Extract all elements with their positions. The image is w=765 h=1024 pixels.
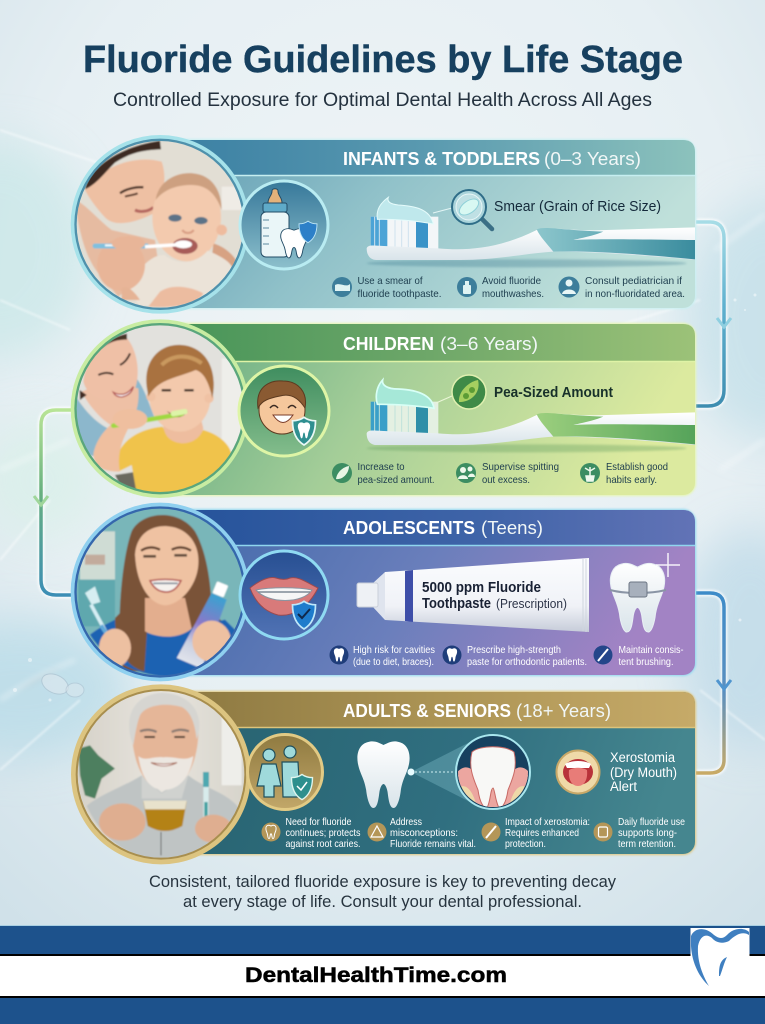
arrow: infants to children [696, 222, 731, 406]
heading: (0–3 Years) [544, 148, 641, 169]
tip: use a smear: Use a smear of [358, 275, 423, 287]
tip: address misconceptions: Fluoride remains vital. [390, 838, 476, 850]
label: xerostomia alert: Xerostomia [610, 750, 675, 765]
heading: CHILDREN [343, 333, 434, 354]
heading: INFANTS & TODDLERS [343, 148, 540, 169]
tip: consult pediatrician [558, 275, 685, 300]
panel: adolescents [165, 509, 696, 676]
subtitle: Controlled Exposure for Optimal Dental Health Across All Ages [113, 90, 652, 111]
tip: need for fluoride: Need for fluoride [286, 816, 352, 828]
tip: need for fluoride: continues; protects [286, 827, 360, 839]
tip: impact of xerostomia: Impact of xerostomia: [505, 816, 590, 828]
tip: avoid mouthwash [457, 275, 544, 300]
closing statement [149, 873, 617, 911]
tip: prescribe [442, 644, 587, 668]
arrow: children to adolescents [34, 410, 72, 595]
closing statement: at every stage of life. Consult your dental professional. [183, 893, 582, 911]
website: DentalHealthTime.com [245, 964, 507, 987]
prescription toothpaste tube: 5000 ppm Fluoride [422, 580, 541, 596]
tip: address misconceptions: misconceptions: [390, 827, 458, 839]
label: pea-sized: Pea-Sized Amount [494, 385, 613, 401]
tip: avoid mouthwash: Avoid fluoride [482, 275, 541, 287]
photo: teen with braces, toothbrush and toothpaste [71, 503, 249, 681]
tip: daily fluoride: Daily fluoride use [618, 816, 685, 828]
title: Fluoride Guidelines by Life Stage [83, 39, 683, 81]
label: xerostomia alert: Alert [610, 779, 637, 794]
photo: mother and child brushing [71, 319, 249, 498]
tip: impact of xerostomia [482, 816, 590, 850]
tip: daily fluoride: term retention. [618, 838, 676, 850]
panel: children [165, 323, 696, 496]
tip: increase: pea-sized amount. [358, 474, 434, 486]
tip: daily fluoride: supports long- [618, 827, 677, 839]
panel: infants and toddlers [165, 139, 696, 309]
tip: maintain brushing: tent brushing. [618, 656, 674, 668]
tip: supervise: Supervise spitting [482, 461, 559, 473]
tip: high risk: High risk for cavities [353, 644, 435, 656]
panel: adults and seniors [165, 691, 696, 855]
closing statement: Consistent, tailored fluoride exposure is key to preventing decay [149, 873, 617, 891]
prescription toothpaste tube [357, 558, 589, 632]
tip: avoid mouthwash: mouthwashes. [482, 288, 544, 300]
footer band [0, 925, 765, 1024]
icon: pea pod [436, 375, 486, 409]
heading [343, 333, 538, 354]
photo: mother brushing baby's teeth [71, 135, 249, 314]
tip: address misconceptions [368, 816, 476, 850]
prescription toothpaste tube: (Prescription) [496, 596, 567, 611]
tip: use a smear: fluoride toothpaste. [358, 288, 442, 300]
tip: good habits: habits early. [606, 474, 657, 486]
tip: increase: Increase to [358, 461, 405, 473]
tip: prescribe: paste for orthodontic patients. [467, 656, 587, 668]
icon: smiling child with shield [239, 366, 329, 456]
icon: mouth with braces and shield [240, 551, 328, 639]
icon: baby bottle and tooth [240, 181, 328, 269]
photo: senior man with tea and toothbrush [71, 684, 251, 864]
tip: use a smear [332, 275, 442, 300]
heading [343, 148, 641, 169]
arrow: adolescents to adults [696, 593, 731, 773]
heading: ADULTS & SENIORS [343, 700, 511, 721]
tip: good habits: Establish good [606, 461, 668, 473]
tip: consult pediatrician: Consult pediatrician if [585, 275, 682, 287]
toothbrush with smear [367, 197, 695, 267]
toothbrush with pea-sized paste [367, 380, 695, 452]
tip: supervise [456, 461, 559, 486]
label: xerostomia alert [610, 750, 677, 794]
label: xerostomia alert: (Dry Mouth) [610, 765, 677, 780]
magnifier callout [433, 190, 492, 229]
tip: prescribe: Prescribe high-strength [467, 644, 561, 656]
magnified tooth cross-section [408, 735, 531, 815]
tip: maintain brushing: Maintain consis- [618, 644, 684, 656]
tip: maintain brushing [594, 644, 684, 668]
tip: impact of xerostomia: protection. [505, 838, 546, 850]
tip: address misconceptions: Address [390, 816, 422, 828]
icon: healthy tooth [357, 741, 410, 808]
heading: (Teens) [481, 517, 543, 538]
tip: daily fluoride [594, 816, 685, 850]
heading: (3–6 Years) [440, 333, 538, 354]
tip: need for fluoride [262, 816, 360, 850]
icon: couple with shield [248, 734, 322, 810]
tip: good habits [580, 461, 668, 486]
icon: tooth with braces [610, 553, 680, 632]
label: smear: Smear (Grain of Rice Size) [494, 199, 661, 215]
tip: impact of xerostomia: Requires enhanced [505, 827, 579, 839]
tip: need for fluoride: against root caries. [286, 838, 360, 850]
tip: high risk: (due to diet, braces). [353, 656, 434, 668]
logo: tooth outline [690, 928, 750, 986]
tip: increase [332, 461, 434, 486]
heading [343, 517, 543, 538]
heading: (18+ Years) [516, 700, 611, 721]
tip: high risk [330, 644, 435, 668]
heading: ADOLESCENTS [343, 517, 475, 538]
tip: supervise: out excess. [482, 474, 530, 486]
heading [343, 700, 611, 721]
tip: consult pediatrician: in non-fluoridated area. [585, 288, 685, 300]
icon: dry mouth [556, 750, 600, 794]
prescription toothpaste tube: Toothpaste [422, 596, 491, 612]
